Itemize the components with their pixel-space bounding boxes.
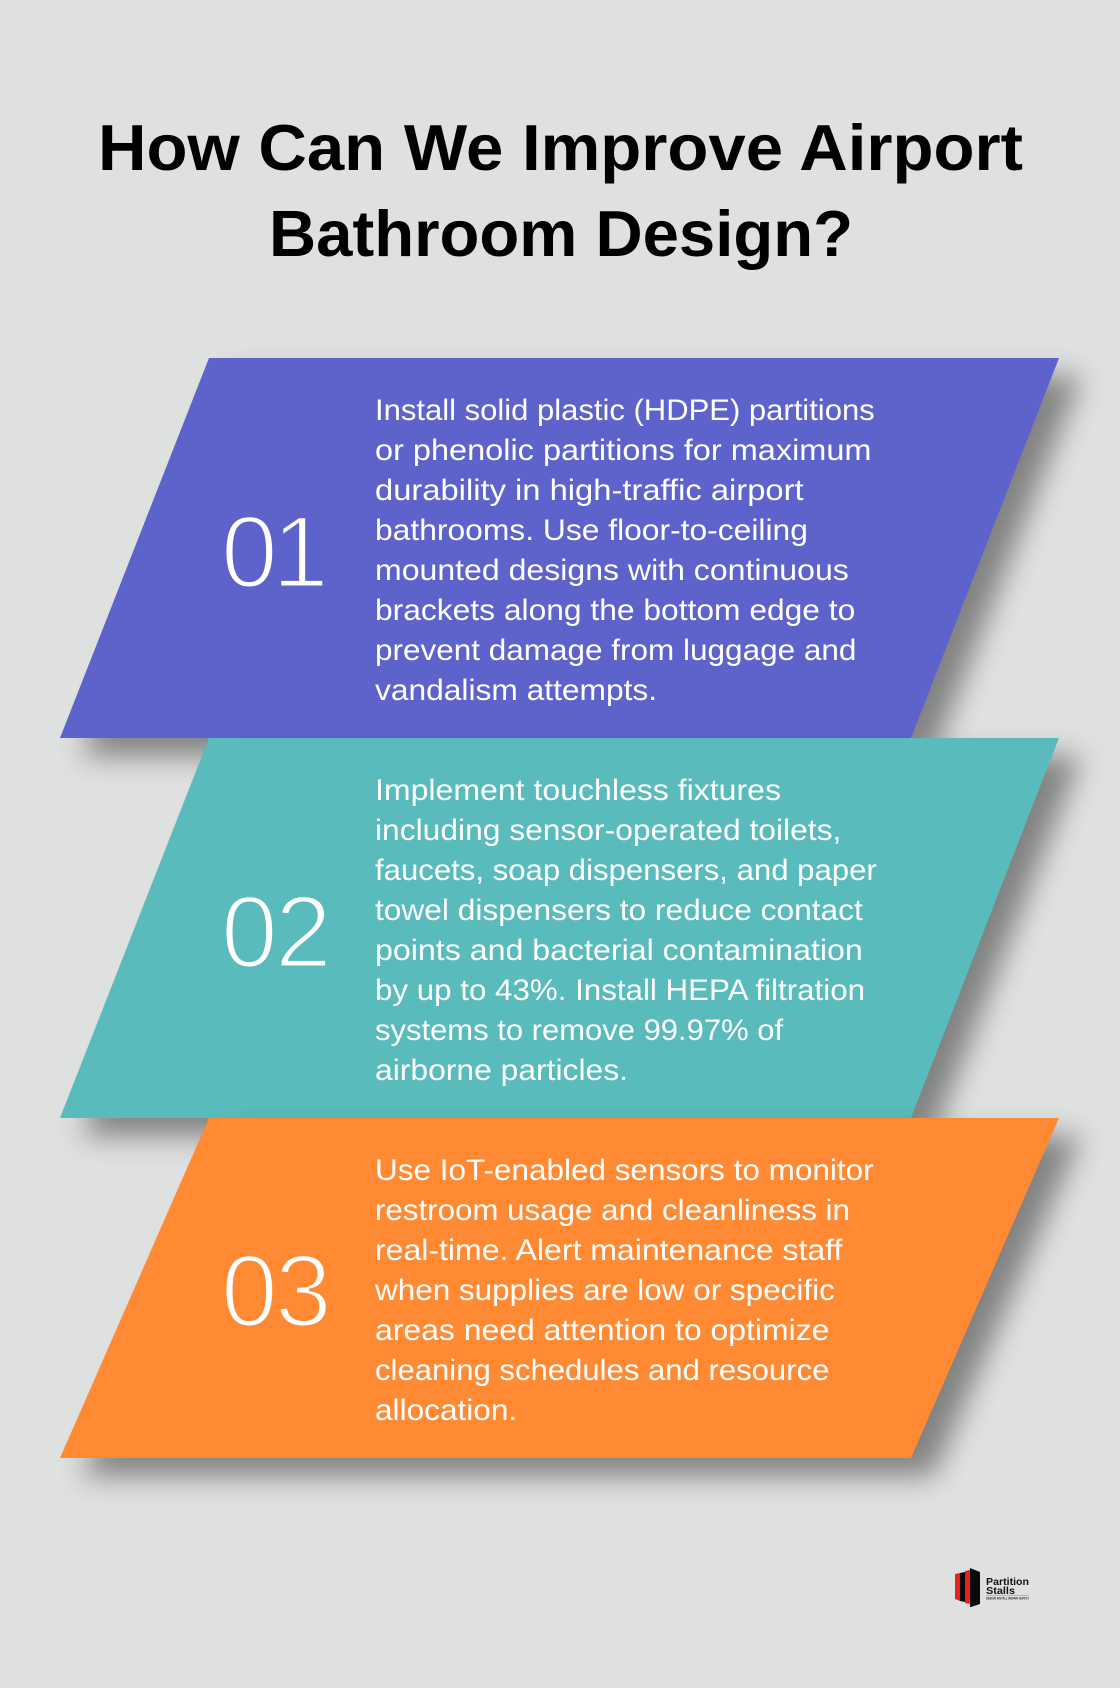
text block: step 03: areas need attention to optimize — [375, 1314, 829, 1347]
text block: step 02: systems to remove 99.97% of — [375, 1014, 784, 1047]
panel: step 01 — [60, 358, 1081, 756]
text block: step 02: Implement touchless fixtures — [375, 774, 781, 807]
panel: step 03 — [60, 1118, 1081, 1476]
text block: step 01: mounted designs with continuous — [375, 554, 849, 587]
text block: step 01: brackets along the bottom edge to — [375, 594, 855, 627]
text block: step 03: restroom usage and cleanliness in — [375, 1194, 850, 1227]
title: Bathroom Design? — [269, 197, 853, 270]
text block: step 03: allocation. — [375, 1394, 517, 1427]
text block: step 02: including sensor-operated toilets, — [375, 814, 841, 847]
text block: step 03: when supplies are low or specific — [374, 1274, 835, 1307]
text block: step 02: airborne particles. — [375, 1054, 628, 1087]
panel: step 02 — [60, 738, 1081, 1136]
step number 02: 02 — [221, 875, 332, 989]
text block: step 01: prevent damage from luggage and — [375, 634, 856, 667]
text block: step 03: cleaning schedules and resource — [375, 1354, 829, 1387]
logo wordmark: Partition — [986, 1576, 1029, 1588]
text block: step 03: real-time. Alert maintenance staff — [375, 1234, 843, 1267]
text block: step 01: durability in high-traffic airport — [375, 474, 804, 507]
text block: step 01 — [375, 394, 875, 707]
title — [98, 111, 1023, 270]
text block: step 01: or phenolic partitions for maximum — [375, 434, 872, 467]
step number 03: 03 — [221, 1234, 332, 1348]
logo wordmark: DESIGN INSTALL REPAIR SUPPLY — [986, 1596, 1029, 1600]
icon: stall panels — [955, 1568, 980, 1607]
text block: step 02: points and bacterial contamination — [375, 934, 863, 967]
title: How Can We Improve Airport — [98, 111, 1023, 184]
logo wordmark — [986, 1576, 1029, 1600]
text block: step 02: towel dispensers to reduce contact — [375, 894, 863, 927]
step number 01: 01 — [221, 495, 329, 609]
text block: step 02: faucets, soap dispensers, and paper — [375, 854, 877, 887]
logo: Partition Stalls — [955, 1568, 1029, 1607]
text block: step 01: Install solid plastic (HDPE) partitions — [375, 394, 875, 427]
text block: step 03: Use IoT-enabled sensors to monitor — [375, 1154, 874, 1187]
text block: step 01: bathrooms. Use floor-to-ceiling — [375, 514, 808, 547]
text block: step 01: vandalism attempts. — [375, 674, 657, 707]
text block: step 02: by up to 43%. Install HEPA filtration — [375, 974, 865, 1007]
text block: step 03 — [374, 1154, 874, 1427]
logo wordmark: Stalls — [986, 1585, 1015, 1597]
text block: step 02 — [375, 774, 877, 1087]
